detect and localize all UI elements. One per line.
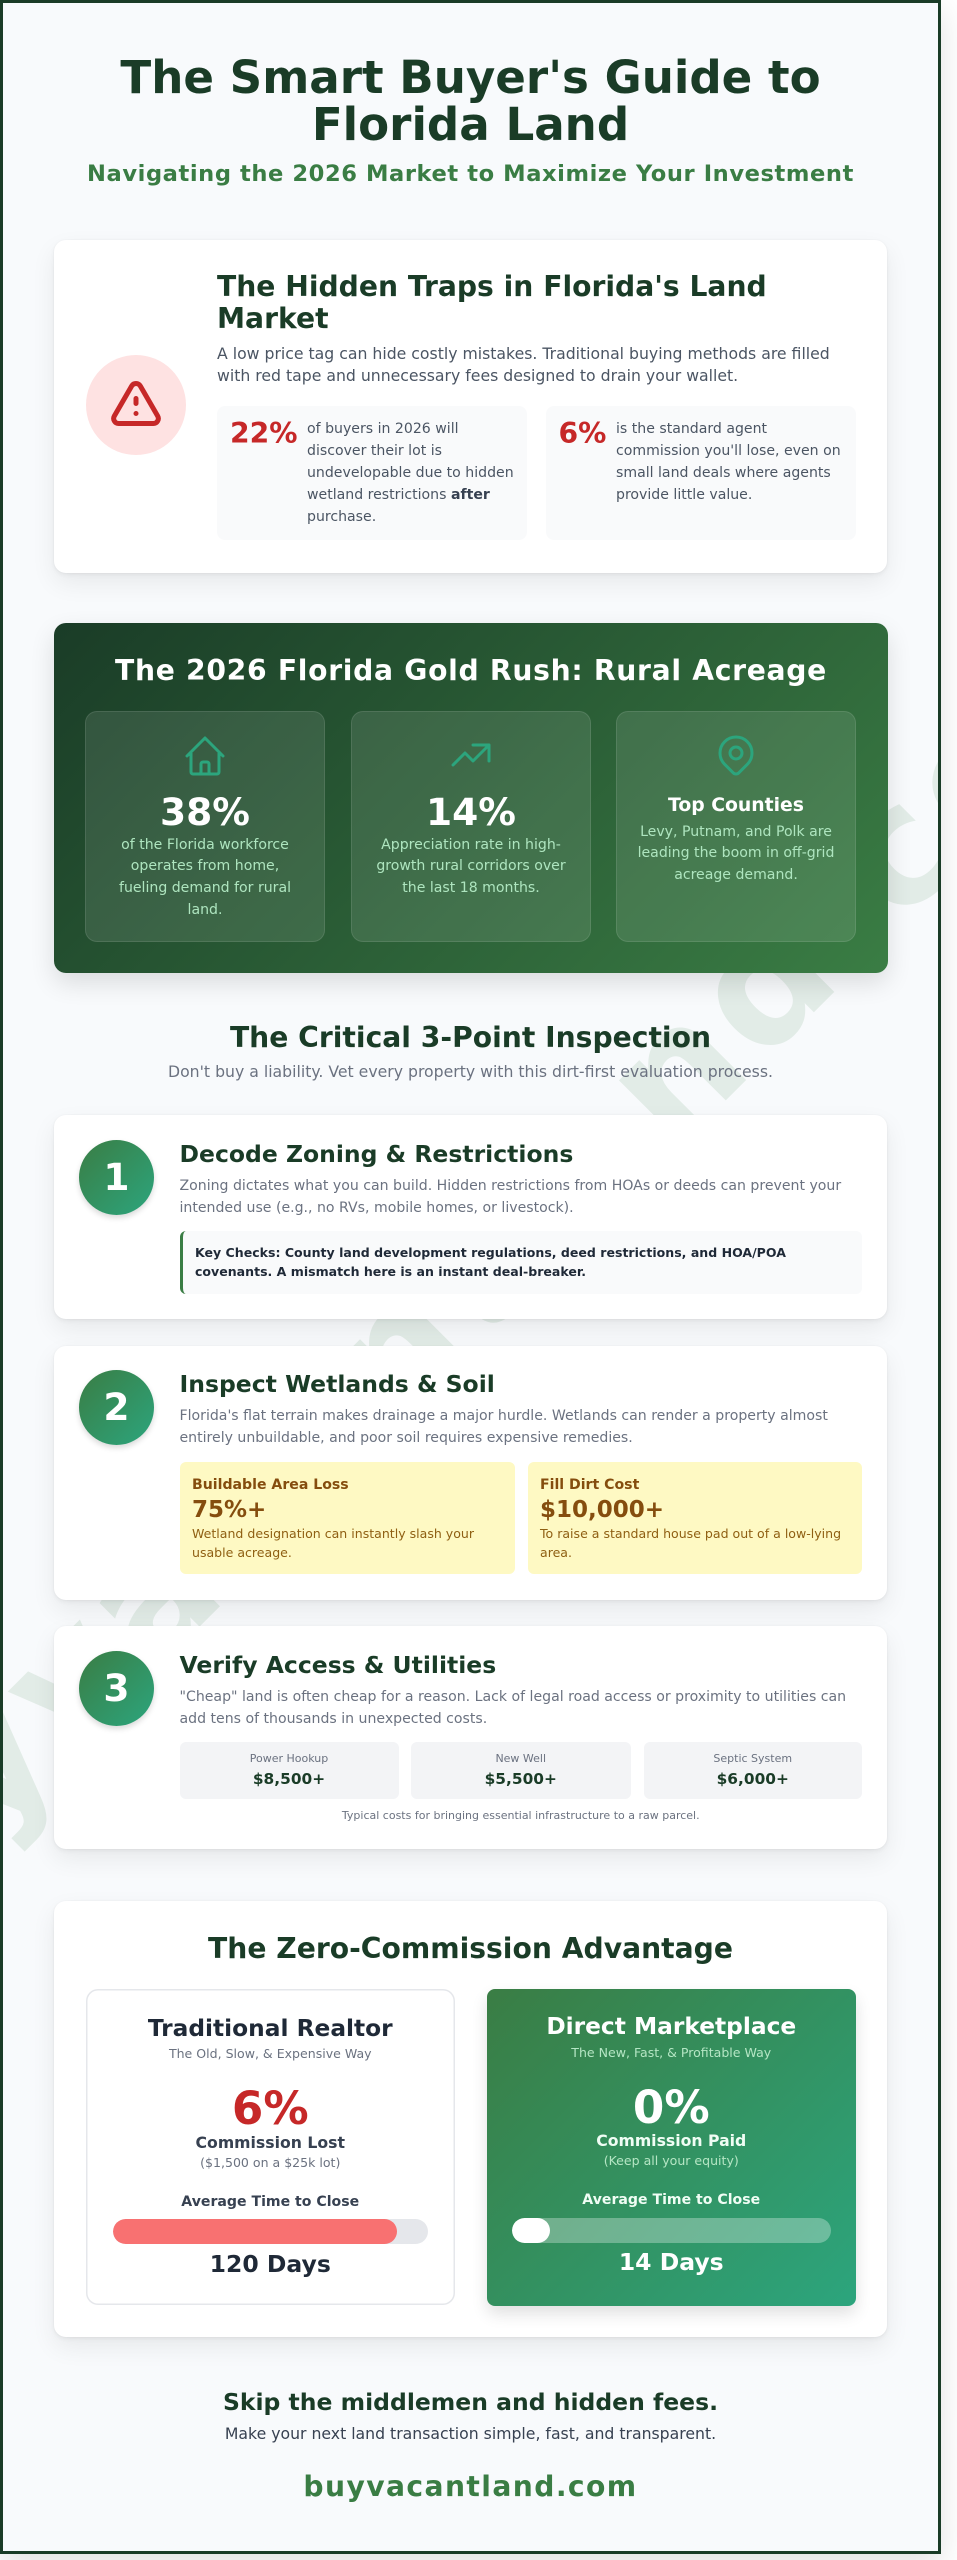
time label: Average Time to Close bbox=[582, 2192, 760, 2208]
stat: buildable area loss bbox=[180, 1462, 514, 1574]
description: leading the boom in off-grid bbox=[638, 845, 834, 861]
commission value: 6% bbox=[232, 2082, 309, 2135]
label: Fill Dirt Cost bbox=[540, 1477, 639, 1493]
stat: 38% bbox=[85, 711, 325, 942]
description: fueling demand for rural bbox=[119, 880, 291, 896]
step title: Verify Access & Utilities bbox=[180, 1651, 496, 1679]
progress bar bbox=[112, 2219, 428, 2244]
title: The Smart Buyer's Guide to bbox=[120, 51, 821, 104]
description bbox=[616, 421, 841, 503]
step number bbox=[79, 1140, 154, 1215]
heading: The Hidden Traps in Florida's Land bbox=[217, 270, 767, 303]
description: commission you'll lose, even on bbox=[616, 443, 841, 459]
commission note: (Keep all your equity) bbox=[604, 2153, 739, 2168]
description: of the Florida workforce bbox=[121, 836, 289, 852]
callout bbox=[180, 1231, 862, 1294]
tagline: The Old, Slow, & Expensive Way bbox=[169, 2046, 372, 2061]
heading bbox=[217, 270, 767, 334]
value: $6,000+ bbox=[717, 1770, 789, 1788]
description: Levy, Putnam, and Polk are bbox=[640, 824, 832, 840]
cost: septic bbox=[644, 1742, 862, 1799]
label: Top Counties bbox=[668, 794, 804, 816]
stat: 22% bbox=[217, 406, 527, 540]
callout: covenants. A mismatch here is an instant deal-breaker. bbox=[195, 1264, 586, 1279]
label: New Well bbox=[495, 1752, 546, 1765]
description: acreage demand. bbox=[674, 867, 798, 883]
description: discover their lot is bbox=[307, 443, 442, 459]
step text bbox=[180, 1689, 846, 1727]
panel: step 3 bbox=[54, 1626, 887, 1849]
description: Appreciation rate in high- bbox=[381, 836, 561, 852]
step number: 1 bbox=[103, 1155, 130, 1199]
subtitle: Navigating the 2026 Market to Maximize Your Investment bbox=[87, 161, 854, 187]
intro text: with red tape and unnecessary fees designed to drain your wallet. bbox=[217, 366, 738, 385]
description: the last 18 months. bbox=[402, 880, 540, 896]
description bbox=[376, 836, 566, 896]
description bbox=[638, 824, 834, 883]
note: usable acreage. bbox=[192, 1545, 292, 1560]
website: buyvacantland.com bbox=[303, 2470, 638, 2503]
label: Septic System bbox=[713, 1752, 792, 1765]
icon: warning triangle bbox=[86, 355, 186, 455]
name: Direct Marketplace bbox=[546, 2013, 796, 2040]
stat: 14% bbox=[351, 711, 591, 942]
commission value: 0% bbox=[633, 2081, 710, 2134]
caption: Typical costs for bringing essential infrastructure to a raw parcel. bbox=[342, 1809, 700, 1822]
number: 38% bbox=[160, 790, 250, 834]
panel: direct marketplace bbox=[486, 1989, 856, 2306]
subheading: Don't buy a liability. Vet every property with this dirt-first evaluation process. bbox=[168, 1062, 773, 1081]
commission label: Commission Paid bbox=[596, 2131, 746, 2150]
heading: Market bbox=[217, 302, 329, 334]
heading: The Zero-Commission Advantage bbox=[208, 1932, 733, 1964]
days: 120 Days bbox=[210, 2250, 331, 2278]
description: is the standard agent bbox=[616, 421, 767, 437]
panel: step 2 bbox=[54, 1346, 887, 1600]
panel: hidden traps bbox=[54, 240, 887, 573]
label: Buildable Area Loss bbox=[192, 1477, 349, 1493]
note: To raise a standard house pad out of a low-lying bbox=[540, 1526, 841, 1541]
title: Florida Land bbox=[312, 98, 629, 151]
panel: gold rush bbox=[54, 623, 888, 973]
call to action: Skip the middlemen and hidden fees. bbox=[223, 2388, 718, 2416]
intro text bbox=[217, 344, 830, 385]
supporting text: Make your next land transaction simple, fast, and transparent. bbox=[225, 2424, 716, 2443]
footer bbox=[223, 2388, 718, 2503]
description: undevelopable due to hidden bbox=[307, 465, 514, 481]
commission label: Commission Lost bbox=[196, 2133, 345, 2152]
number: 22% bbox=[230, 417, 297, 450]
description: growth rural corridors over bbox=[376, 858, 566, 874]
section heading: inspection bbox=[168, 1021, 773, 1081]
step number bbox=[79, 1651, 154, 1726]
step text: "Cheap" land is often cheap for a reason. Lack of legal road access or proximity to utilities can bbox=[180, 1689, 846, 1705]
commission note: ($1,500 on a $25k lot) bbox=[200, 2155, 340, 2170]
description: purchase. bbox=[307, 509, 376, 525]
cost: well bbox=[411, 1742, 630, 1799]
progress bar bbox=[512, 2218, 831, 2243]
description: of buyers in 2026 will bbox=[307, 421, 459, 437]
step text: intended use (e.g., no RVs, mobile homes, or livestock). bbox=[180, 1200, 574, 1216]
heading: The Critical 3-Point Inspection bbox=[230, 1021, 711, 1054]
note: area. bbox=[540, 1545, 572, 1560]
note bbox=[192, 1526, 474, 1560]
label: Power Hookup bbox=[250, 1752, 328, 1765]
step number: 2 bbox=[103, 1385, 130, 1429]
step text: add tens of thousands in unexpected costs. bbox=[180, 1711, 487, 1727]
stat: 6% bbox=[546, 406, 856, 540]
value: $8,500+ bbox=[253, 1770, 325, 1788]
stat: fill dirt cost bbox=[528, 1462, 862, 1574]
description: operates from home, bbox=[131, 858, 279, 874]
value: $10,000+ bbox=[540, 1497, 664, 1523]
note bbox=[540, 1526, 841, 1560]
cost: power bbox=[180, 1742, 398, 1799]
step number bbox=[79, 1370, 154, 1445]
callout: Key Checks: County land development regulations, deed restrictions, and HOA/POA bbox=[195, 1245, 786, 1260]
note: Wetland designation can instantly slash your bbox=[192, 1526, 474, 1541]
step text bbox=[180, 1178, 842, 1216]
description: provide little value. bbox=[616, 487, 752, 503]
name: Traditional Realtor bbox=[148, 2015, 393, 2042]
time label: Average Time to Close bbox=[181, 2194, 359, 2210]
value: $5,500+ bbox=[485, 1770, 557, 1788]
icon: map pin bbox=[718, 736, 754, 776]
step text bbox=[180, 1408, 828, 1446]
header bbox=[87, 51, 854, 187]
step title: Inspect Wetlands & Soil bbox=[180, 1370, 495, 1398]
panel: traditional realtor bbox=[86, 1989, 454, 2305]
description bbox=[119, 836, 291, 918]
title bbox=[120, 51, 821, 151]
step title: Decode Zoning & Restrictions bbox=[180, 1140, 573, 1168]
days: 14 Days bbox=[619, 2248, 724, 2276]
description: land. bbox=[188, 902, 222, 918]
step text: Florida's flat terrain makes drainage a major hurdle. Wetlands can render a property almost bbox=[180, 1408, 828, 1424]
description bbox=[307, 421, 514, 525]
step text: entirely unbuildable, and poor soil requires expensive remedies. bbox=[180, 1430, 633, 1446]
intro text: A low price tag can hide costly mistakes. Traditional buying methods are filled bbox=[217, 344, 830, 363]
panel: step 1 bbox=[54, 1115, 887, 1319]
step text: Zoning dictates what you can build. Hidden restrictions from HOAs or deeds can prevent your bbox=[180, 1178, 841, 1194]
description: small land deals where agents bbox=[616, 465, 831, 481]
description: wetland restrictions after bbox=[307, 487, 490, 503]
number: 6% bbox=[558, 417, 606, 450]
heading: The 2026 Florida Gold Rush: Rural Acreage bbox=[115, 654, 827, 687]
number: 14% bbox=[426, 790, 516, 834]
value: 75%+ bbox=[192, 1497, 266, 1523]
icon: house bbox=[186, 736, 224, 776]
stat: top counties bbox=[616, 711, 856, 942]
icon: trending up bbox=[452, 744, 490, 766]
step number: 3 bbox=[103, 1666, 130, 1710]
panel: zero-commission comparison bbox=[54, 1901, 887, 2337]
tagline: The New, Fast, & Profitable Way bbox=[571, 2045, 771, 2060]
